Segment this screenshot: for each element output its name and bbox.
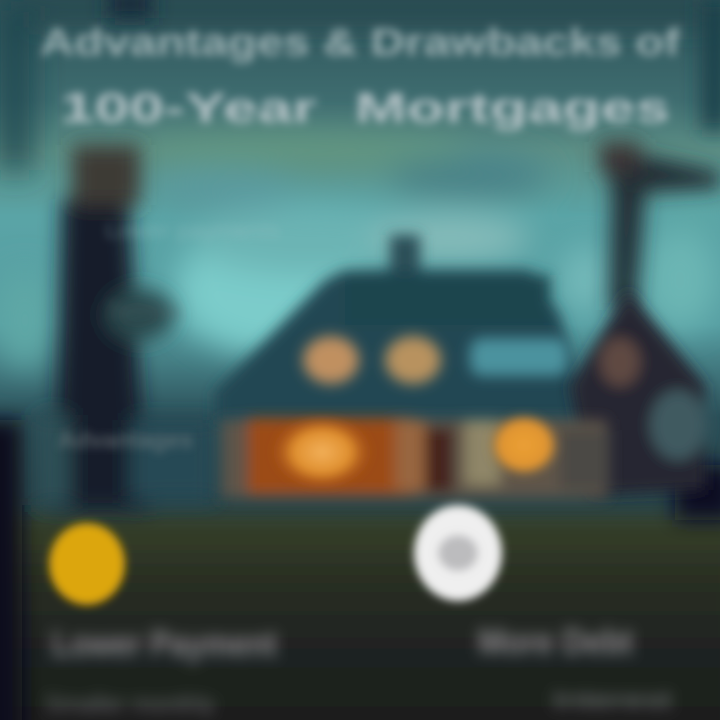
title: [40, 22, 680, 131]
house: neighbouring gable: [570, 290, 706, 495]
faint sky captions: Terms: [105, 298, 180, 323]
left side label: Advantages: [58, 427, 193, 454]
house: ground floor with glowing windows: [222, 418, 610, 498]
house: upper windows: [303, 336, 568, 384]
house: window glow: [270, 411, 562, 490]
faint sky captions: [105, 218, 280, 323]
left caption: Lower Payment: [52, 623, 277, 664]
right footnote: Interest: [552, 687, 672, 714]
left footnote: Smaller monthly: [45, 691, 215, 718]
title: Advantages & Drawbacks of: [40, 22, 680, 64]
ground: dark lawn: [0, 515, 720, 720]
title: 100-Year Mortgages: [60, 84, 670, 131]
icon: white circle: [414, 505, 502, 601]
right caption: More Debt: [478, 621, 633, 662]
faint sky captions: Lower payments: [105, 218, 280, 243]
right dark tree silhouette: [598, 0, 720, 520]
house: main roof and upper storey: [215, 235, 590, 420]
left dark edge and tree: [0, 0, 215, 720]
icon: yellow circle: [49, 523, 125, 605]
